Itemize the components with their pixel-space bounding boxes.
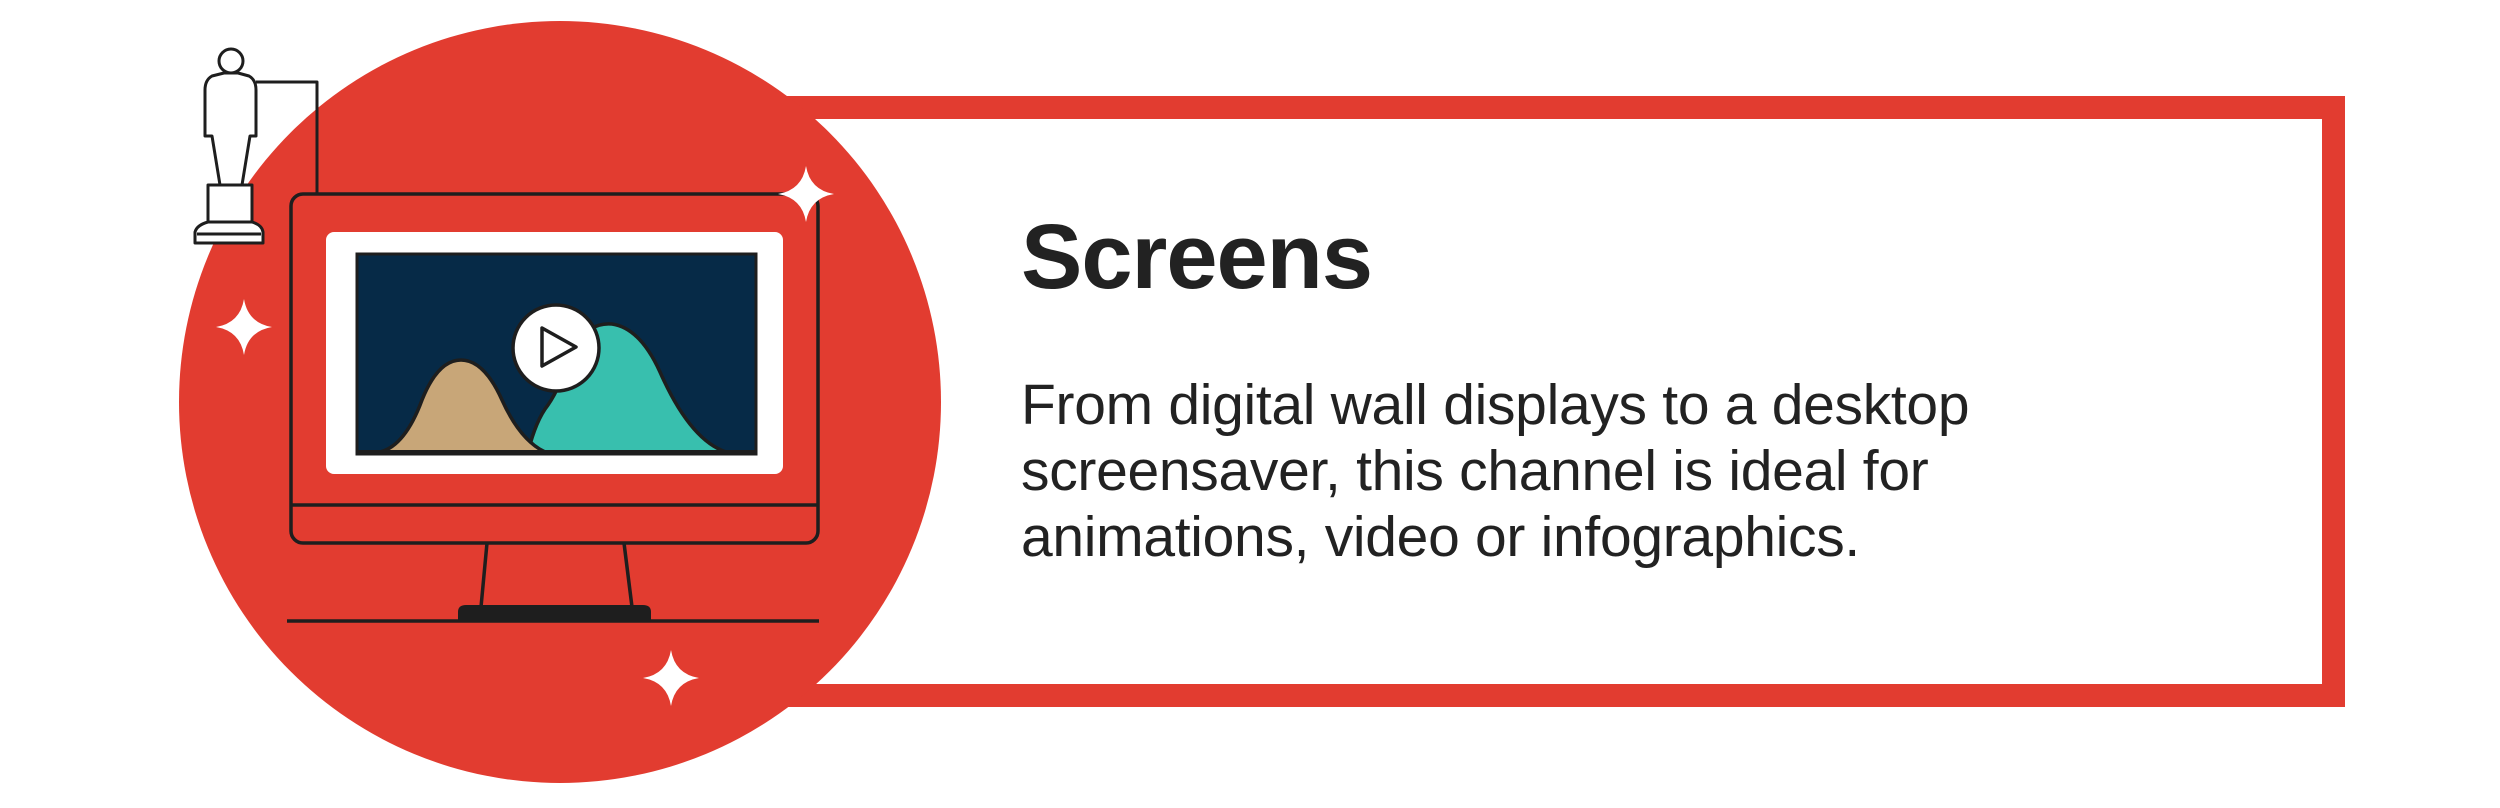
text block: description: [1021, 373, 1969, 569]
panel: bordered box: [700, 96, 2345, 707]
text block: description: animations, video or infographics.: [1021, 505, 1860, 569]
icon: play button: [513, 305, 599, 391]
text block: description: screensaver, this channel is ideal for: [1021, 439, 1928, 503]
icon: trophy: [195, 49, 317, 243]
text block: description: From digital wall displays to a desktop: [1021, 373, 1969, 437]
icon: sparkles: [216, 166, 834, 706]
illustration: monitor in circle: [179, 21, 941, 783]
red circle: [179, 21, 941, 783]
icon: monitor: [287, 194, 819, 621]
mountains: [528, 324, 726, 452]
title: Screens: [1021, 206, 1372, 308]
stand: [481, 543, 487, 607]
